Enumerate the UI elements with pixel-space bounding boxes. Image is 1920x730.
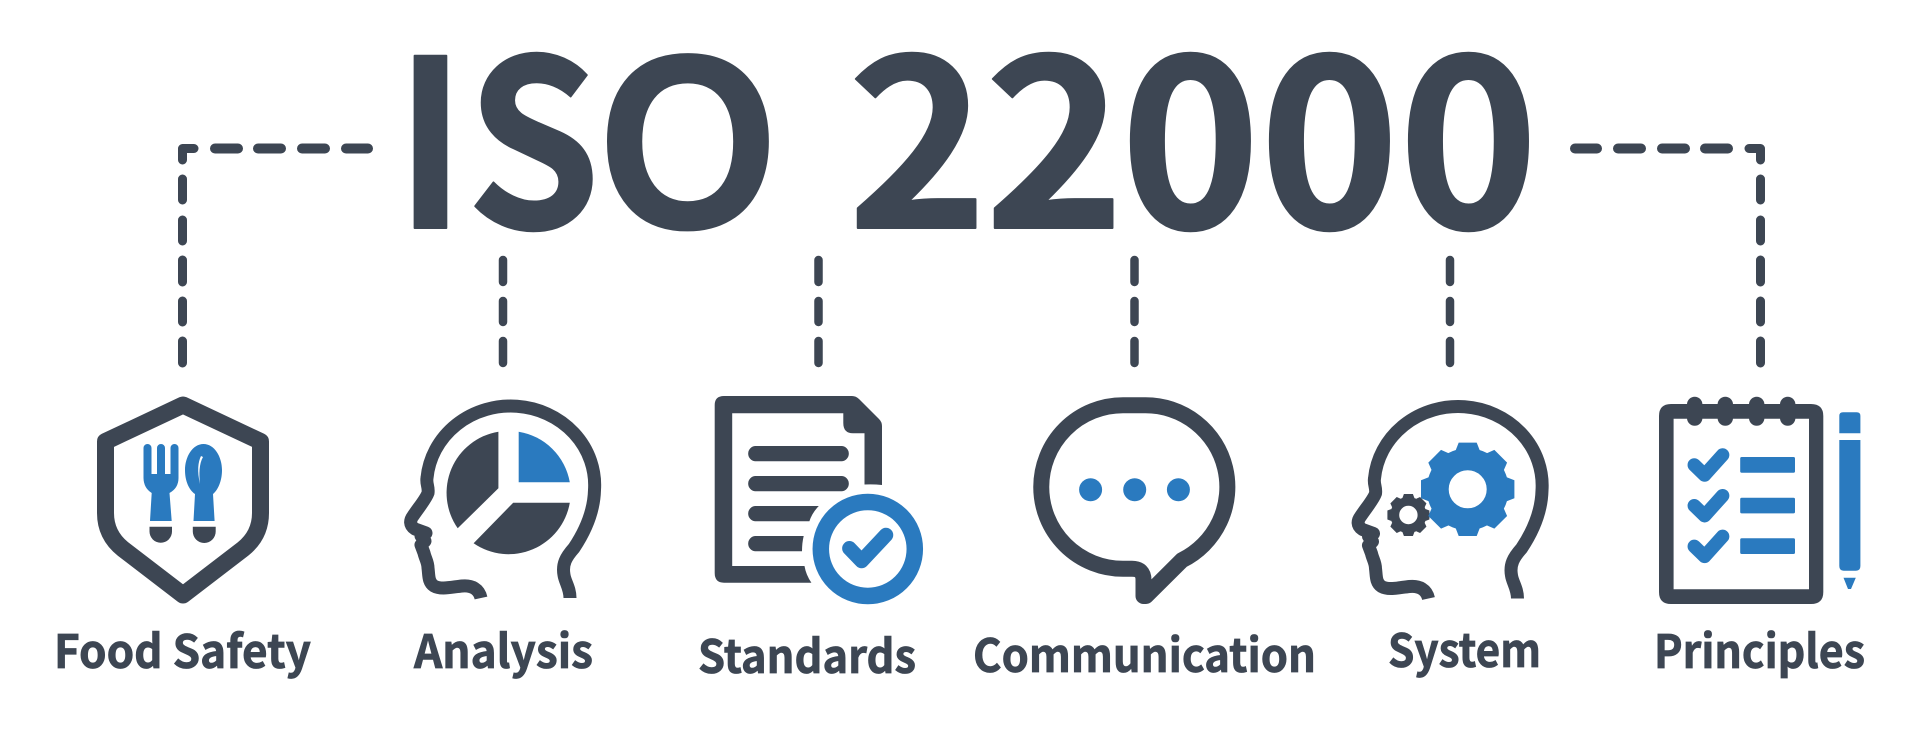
check	[849, 535, 886, 561]
title	[395, 0, 1538, 295]
connector: analysis drop	[499, 260, 507, 363]
pencil	[1839, 412, 1860, 589]
connector: left dashed elbow	[182, 148, 368, 363]
spoon	[185, 444, 222, 521]
handle caps	[150, 527, 216, 543]
label: communication: Communication	[973, 620, 1316, 686]
dots	[1079, 478, 1102, 501]
icon: standards document with check badge	[715, 396, 915, 596]
text lines	[748, 446, 849, 551]
connector: system drop	[1446, 260, 1454, 363]
icon: food safety shield	[106, 405, 260, 595]
list bars	[1740, 457, 1795, 554]
icon: communication speech bubble	[1041, 405, 1227, 596]
fork	[144, 444, 178, 521]
label: standards: Standards	[698, 621, 916, 687]
label: food safety: Food Safety	[54, 616, 311, 682]
check marks	[1694, 455, 1723, 556]
head outline	[1358, 407, 1542, 598]
pie: left slice	[447, 432, 498, 528]
head outline	[411, 406, 595, 598]
binder rings	[1687, 397, 1795, 426]
label: system: System	[1388, 615, 1541, 681]
label: analysis: Analysis	[413, 616, 593, 682]
notepad	[1659, 404, 1823, 604]
badge	[821, 502, 915, 596]
large gear	[1421, 443, 1514, 536]
icon: analysis head with pie chart	[411, 406, 595, 598]
label: principles: Principles	[1654, 616, 1865, 682]
connector: communication drop	[1130, 260, 1139, 363]
pie: blue slice	[519, 432, 570, 482]
connector: standards drop	[814, 260, 823, 363]
connector: right dashed elbow	[1575, 148, 1760, 363]
icon: system head with gears	[1358, 407, 1542, 598]
document	[715, 396, 882, 583]
small gear	[1387, 494, 1429, 536]
icon: principles notepad with pencil	[1659, 397, 1860, 604]
pie: lower slice	[474, 503, 570, 554]
title: O	[598, 3, 778, 281]
